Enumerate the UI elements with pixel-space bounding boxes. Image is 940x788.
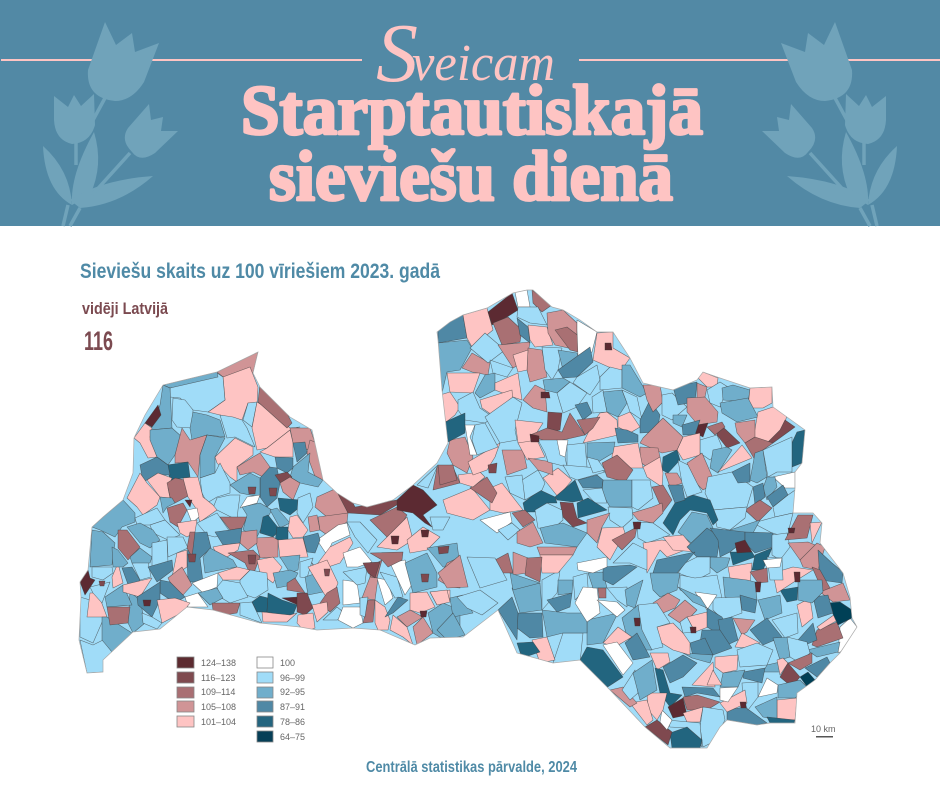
legend: 105–108 (201, 702, 236, 712)
header banner (0, 0, 940, 226)
title: Sveicam: veicam (412, 35, 555, 92)
legend: 101–104 (201, 717, 236, 727)
value: 116: 116 (84, 326, 113, 356)
decorative line left (1, 59, 362, 61)
icon: tulips left (43, 22, 178, 226)
title: Starptautiskajā: Starptautiskajā (241, 72, 703, 150)
label: average in Latvia: vidēji Latvijā (82, 299, 168, 318)
legend: 78–86 (280, 717, 305, 727)
title: sieviešu dienā: sieviešu dienā (269, 138, 673, 216)
title: Sveicam (376, 7, 555, 100)
icon: tulips right (762, 22, 897, 226)
legend: 87–91 (280, 702, 305, 712)
legend: 92–95 (280, 687, 305, 697)
legend: 109–114 (201, 687, 235, 697)
source: Centrālā statistikas pārvalde, 2024 (366, 759, 577, 776)
title: Sveicam: S (376, 7, 418, 100)
legend: 96–99 (280, 673, 305, 683)
map outline (79, 290, 857, 748)
choropleth map of Latvia (79, 290, 856, 748)
legend: 100 (280, 658, 295, 668)
scale bar: 10 km (811, 724, 836, 734)
legend: 124–138 (201, 658, 236, 668)
legend (177, 657, 305, 742)
decorative line right (579, 59, 940, 61)
legend: 116–123 (201, 673, 235, 683)
legend: 64–75 (280, 732, 305, 742)
chart heading: Sieviešu skaits uz 100 vīriešiem 2023. gadā (80, 260, 440, 283)
